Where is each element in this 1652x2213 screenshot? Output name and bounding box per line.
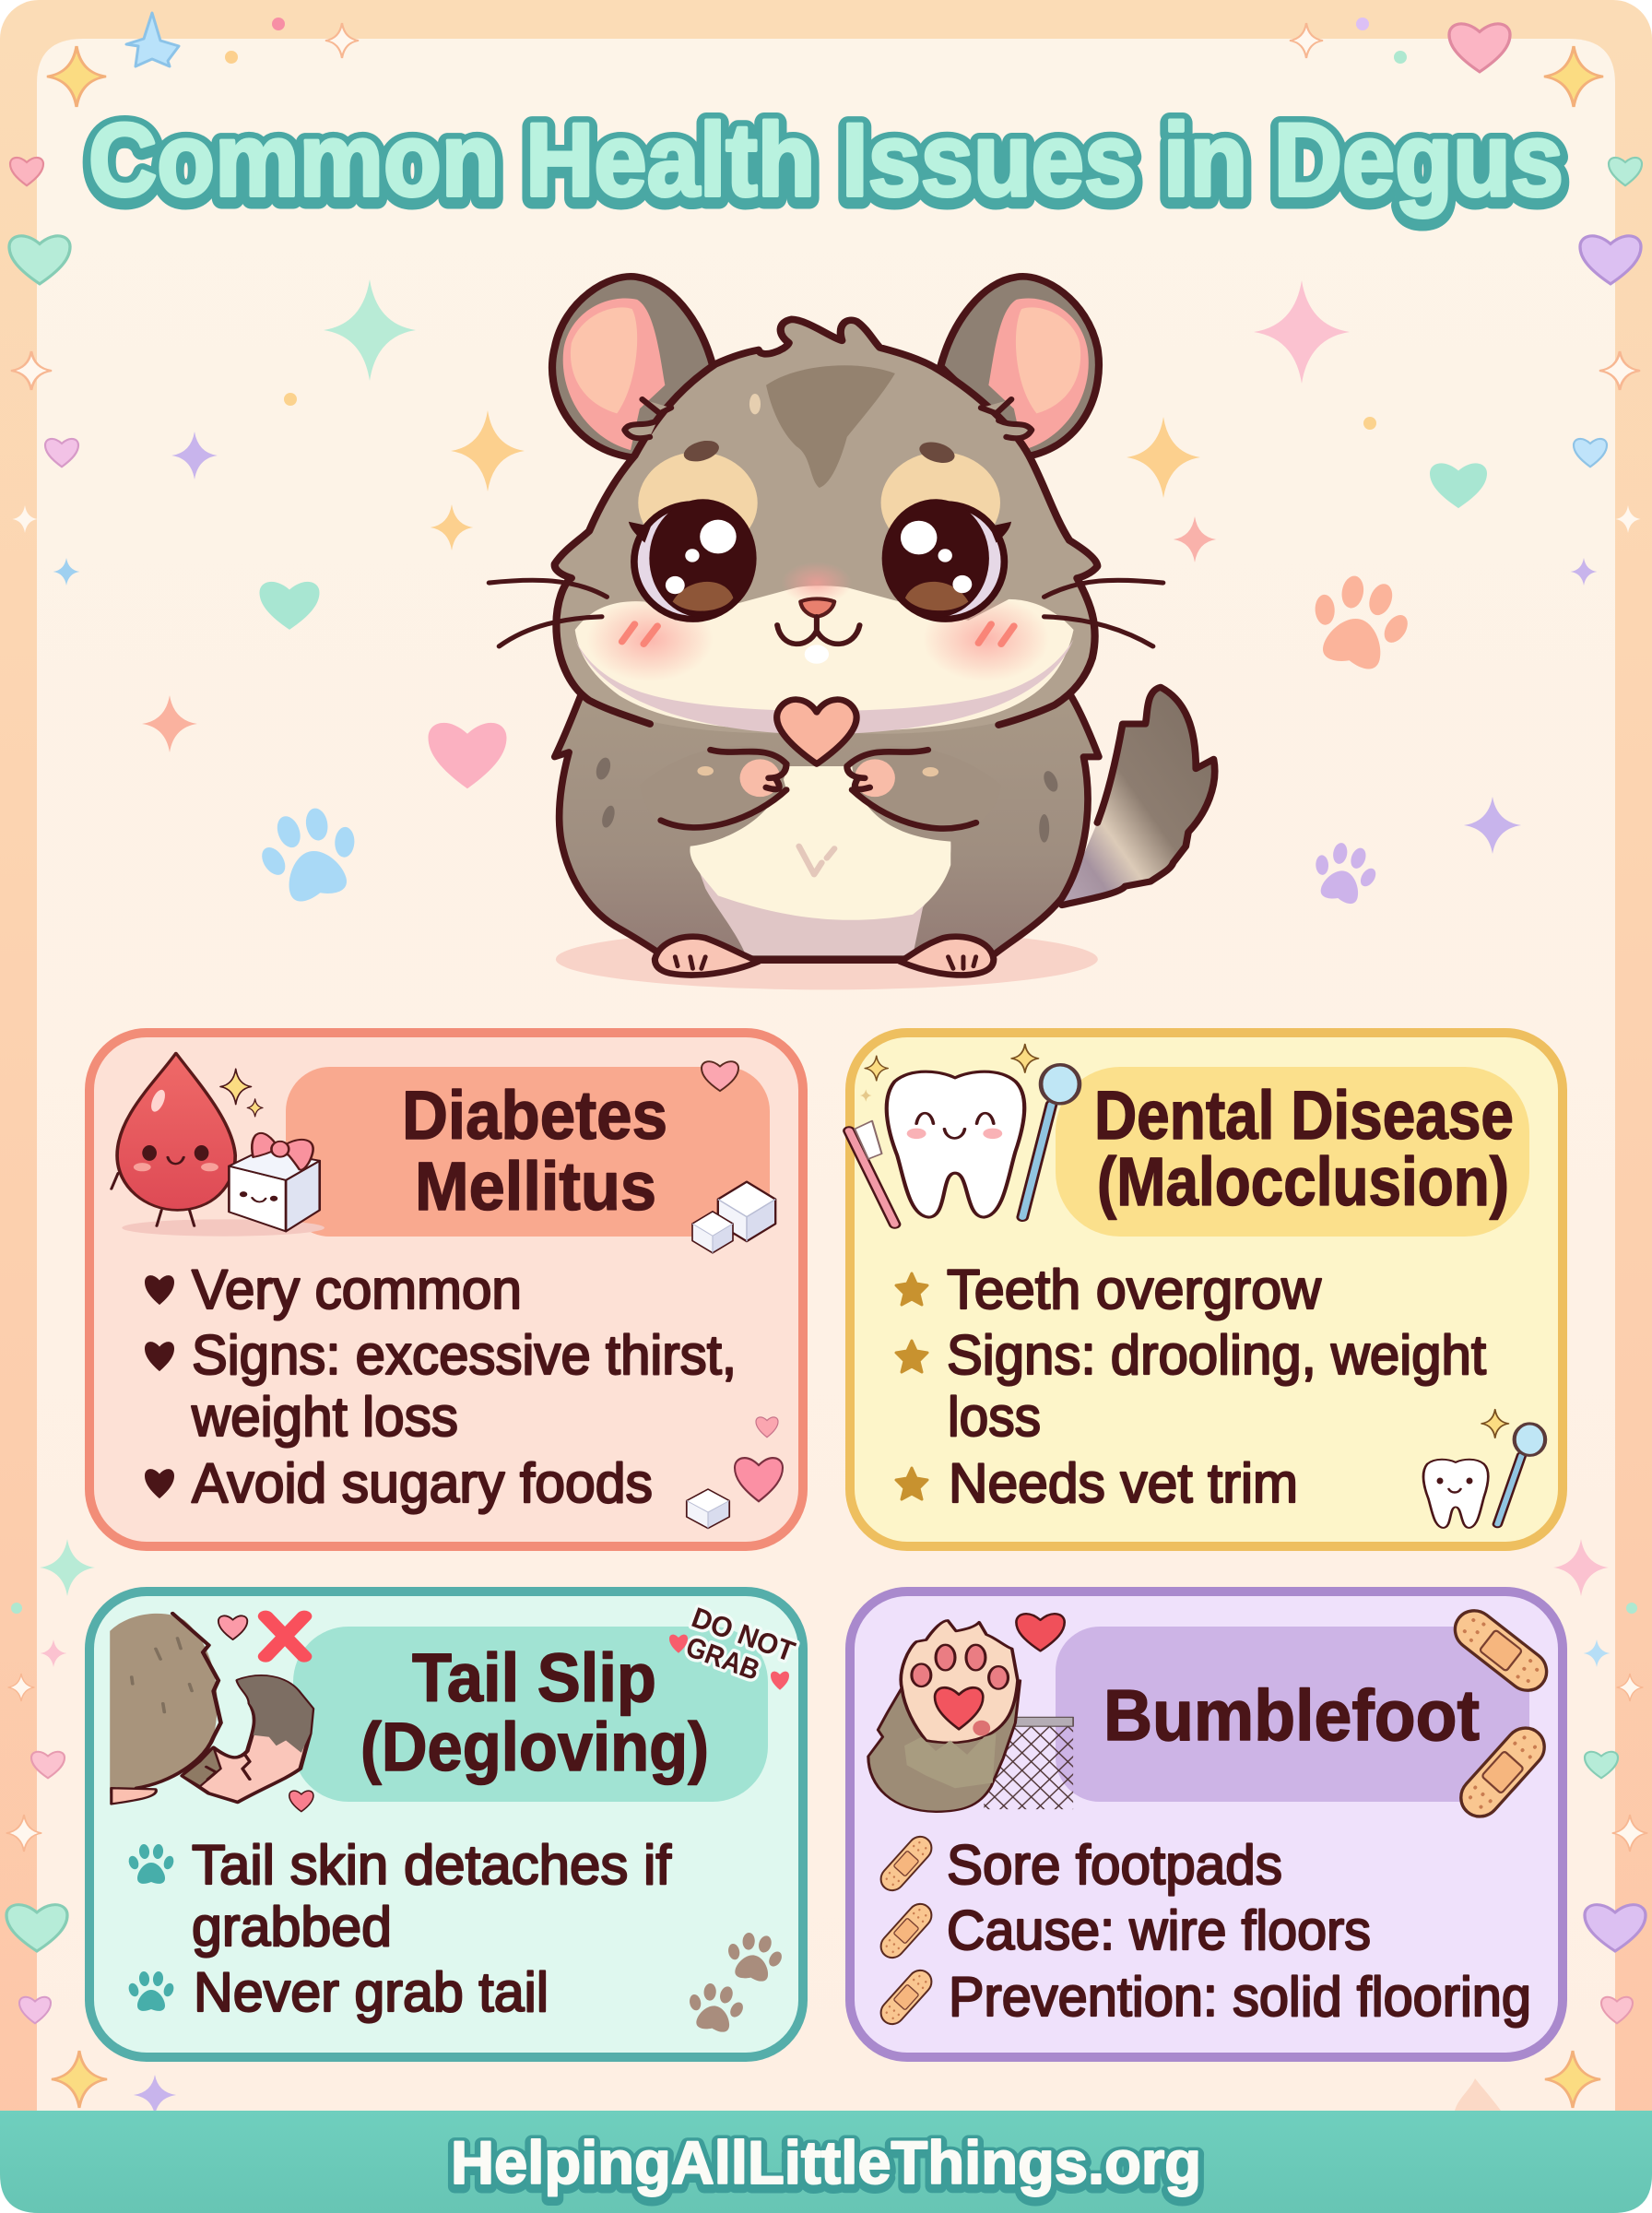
bullet list (896, 1259, 1486, 1514)
decorative brown paws (683, 1929, 787, 2035)
bullet list (127, 1834, 671, 2023)
heading pill (293, 1627, 768, 1802)
small dental mirror (1497, 1424, 1545, 1524)
foot (112, 1788, 156, 1804)
heading: Mellitus (415, 1148, 656, 1225)
sparkles (220, 1069, 251, 1105)
card background (89, 1592, 803, 2057)
left eye (629, 499, 757, 619)
do not: DO NOT (688, 1601, 799, 1668)
cream muzzle and cheeks (575, 586, 1074, 731)
bullet list: grabbed (192, 1896, 392, 1958)
red cross (266, 1616, 304, 1656)
bullet list: weight loss (191, 1386, 458, 1448)
bullet list: Tail skin detaches if (192, 1834, 671, 1896)
panel: dental disease (849, 1033, 1563, 1546)
wire floor (984, 1717, 1073, 1809)
bullet list: Teeth overgrow (947, 1259, 1322, 1320)
floating heart (1016, 1614, 1065, 1651)
bullet paws (127, 1843, 175, 2011)
heading: (Degloving) (360, 1709, 709, 1785)
bullet list: Needs vet trim (949, 1452, 1298, 1514)
left arm and paw (640, 746, 786, 830)
card background (89, 1033, 803, 1546)
head outline (555, 319, 1097, 725)
icon: blood drop and sugar cube (112, 1053, 324, 1237)
bullet list: Very common (192, 1259, 522, 1320)
sparkle (1481, 1410, 1508, 1438)
bullet list: Prevention: solid flooring (949, 1966, 1531, 2028)
bullet list: Avoid sugary foods (192, 1452, 653, 1514)
bullet list: Never grab tail (194, 1961, 549, 2023)
dark forehead stripe (766, 365, 895, 488)
right ear (940, 277, 1099, 458)
degu body (110, 1614, 218, 1793)
bullet hearts (145, 1275, 174, 1498)
head (555, 319, 1097, 734)
heading: Diabetes (402, 1077, 667, 1154)
bullet list (876, 1832, 1531, 2029)
toothbrush (849, 1121, 895, 1225)
furry leg (868, 1680, 1021, 1812)
heading: Tail Slip (412, 1639, 656, 1716)
heading (1094, 1077, 1514, 1220)
cheek blush (586, 562, 1049, 681)
heading pill (1056, 1067, 1529, 1237)
do not grab sticker (678, 1601, 799, 1696)
website address: HelpingAllLittleThings.org (451, 2128, 1201, 2196)
bullet list: Signs: drooling, weight (947, 1324, 1486, 1386)
right arm and paw (847, 746, 1001, 830)
fur marks (132, 1639, 192, 1712)
title: Common Health Issues in Degus (88, 102, 1564, 218)
drop face (112, 1089, 218, 1226)
right eye (882, 499, 1011, 619)
bullet list (145, 1259, 737, 1514)
card background (850, 1592, 1563, 2057)
toe pads (912, 1645, 1009, 1689)
tail outline (1062, 687, 1215, 905)
pink bow (252, 1133, 313, 1170)
heart pad (935, 1687, 983, 1729)
bullet list: Signs: excessive thirst, (192, 1324, 737, 1386)
shadow (122, 1219, 324, 1237)
title: Common Health Issues in Degus (88, 105, 1564, 220)
tail (1062, 687, 1215, 905)
website address: HelpingAllLittleThings.org (451, 2131, 1201, 2199)
sticker hearts (669, 1635, 789, 1690)
heading (402, 1077, 667, 1225)
dental mirror (1022, 1065, 1080, 1217)
head fill (555, 319, 1097, 734)
feet (655, 937, 994, 975)
whiskers (489, 580, 1163, 646)
heading: (Malocclusion) (1097, 1143, 1509, 1220)
grab: GRAB (682, 1630, 764, 1686)
card background (850, 1033, 1563, 1546)
body outline (136, 1614, 221, 1788)
ear tufts right (981, 399, 1032, 438)
heart held by the degu (777, 700, 856, 763)
heading pill (286, 1067, 770, 1237)
footer band (0, 2111, 1652, 2213)
tooth face (907, 1113, 1002, 1139)
tooth (887, 1071, 1024, 1217)
small tooth (1423, 1460, 1488, 1528)
eyebrows (681, 437, 958, 467)
fur fringe (904, 1734, 996, 1788)
body (555, 693, 1099, 959)
tail (183, 1676, 313, 1802)
ear tufts (624, 399, 671, 438)
bullet stars (896, 1273, 927, 1499)
bullet list: Sore footpads (947, 1834, 1282, 1896)
heading pill (1056, 1627, 1529, 1802)
small tooth face (1436, 1477, 1473, 1492)
bullet list: Cause: wire floors (947, 1899, 1371, 1961)
panel: diabetes mellitus (89, 1033, 803, 1546)
sore spot (973, 1721, 990, 1736)
large bandages (1447, 1603, 1554, 1825)
sugar cube (229, 1150, 320, 1231)
icon: degu rear with slipped tail (110, 1614, 313, 1812)
panel: tail slip (89, 1592, 803, 2057)
heading (360, 1639, 709, 1785)
lilac under-cheek shading (575, 639, 1074, 734)
decorative hearts and sugar cubes (687, 1061, 783, 1529)
bullet bandages (876, 1832, 937, 2029)
left ear (552, 277, 713, 458)
ground shadow (556, 929, 1098, 989)
heading: Dental Disease (1094, 1077, 1514, 1154)
heading: Bumblefoot (1103, 1675, 1480, 1756)
hearts (218, 1615, 247, 1639)
blood drop (117, 1053, 235, 1210)
panel: bumblefoot (850, 1592, 1563, 2057)
sparkles (865, 1056, 888, 1081)
icon: sore paw and wire floor (868, 1614, 1073, 1812)
icon: smiling tooth with toothbrush and mirror (849, 1045, 1545, 1528)
nose and mouth (777, 598, 860, 664)
paw (901, 1620, 1018, 1743)
illustration: cute degu holding a heart (489, 277, 1215, 989)
bullet list: loss (948, 1386, 1041, 1448)
